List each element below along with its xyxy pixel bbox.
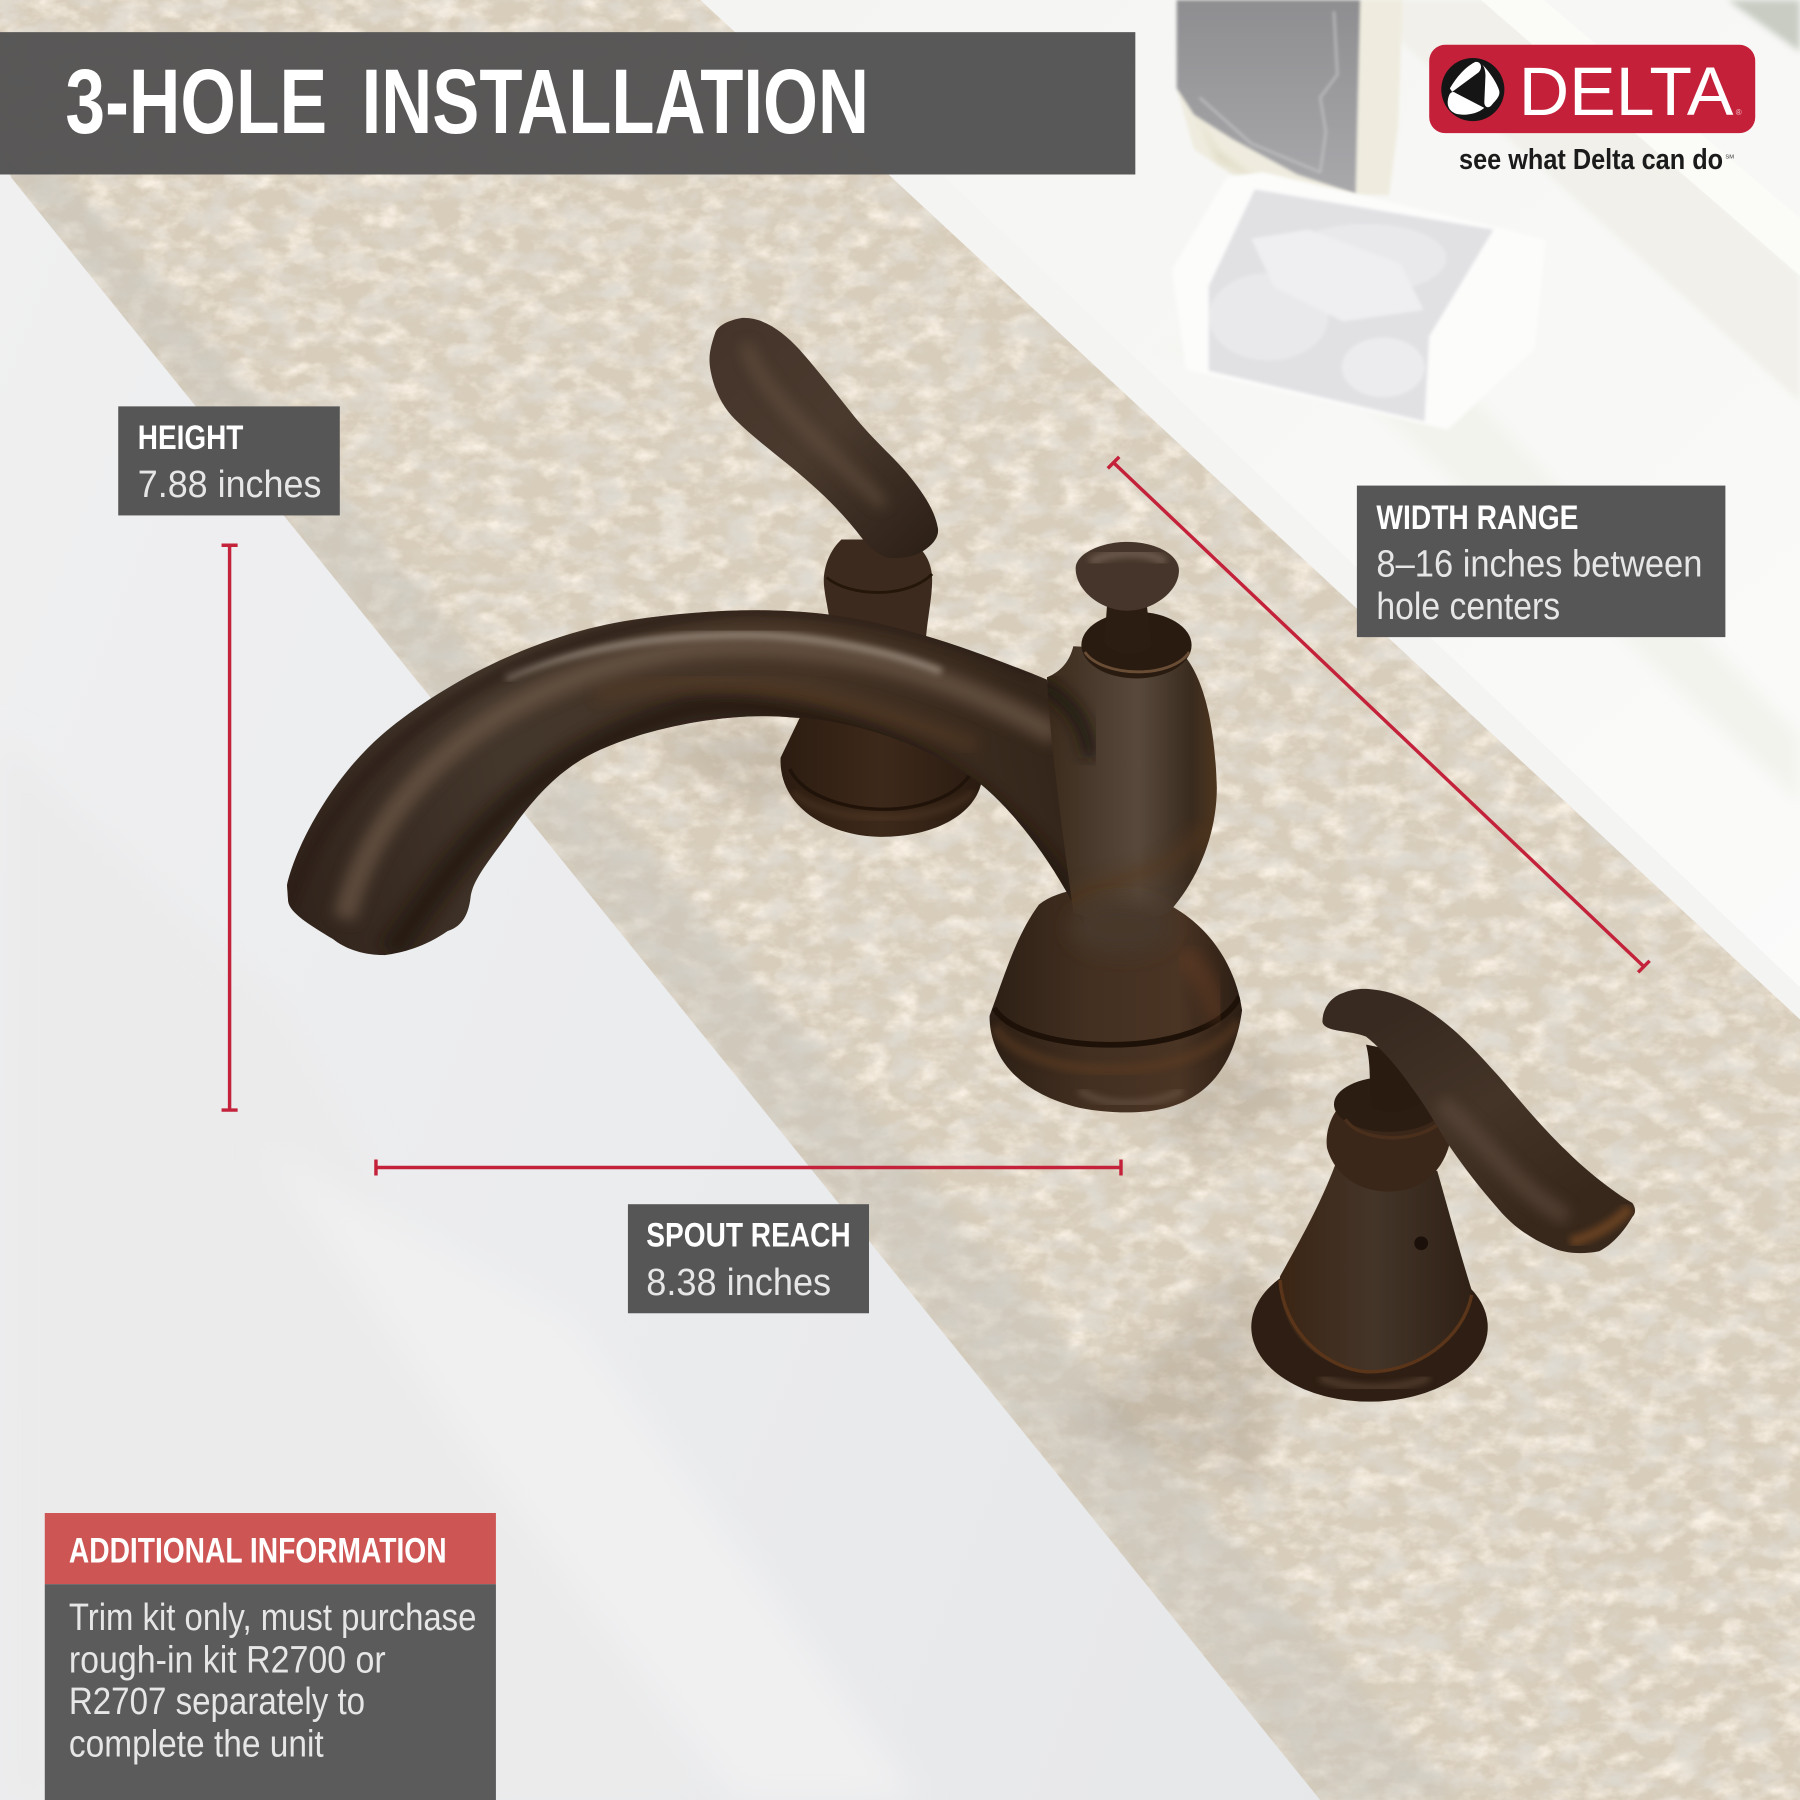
logo wordmark: DELTA — [1519, 53, 1733, 130]
back handle base — [781, 700, 983, 837]
faucet: front handle — [1251, 989, 1635, 1402]
panel: additional information: rough-in kit R2700 or — [69, 1640, 386, 1682]
label: height: 7.88 inches — [138, 464, 321, 506]
dimension line: width range — [1108, 457, 1650, 972]
logo badge — [1429, 45, 1755, 133]
tagline: see what Delta can do — [1459, 144, 1723, 176]
label: width range — [1357, 486, 1725, 637]
title: INSTALLATION — [362, 51, 869, 153]
label: width range: hole centers — [1376, 586, 1560, 628]
logo symbol — [1441, 58, 1504, 121]
countertop front edge — [0, 149, 1458, 1800]
front handle set-screw hole — [1414, 1236, 1428, 1250]
label: height — [118, 406, 340, 515]
front handle cone — [1280, 1165, 1472, 1372]
faucet: back handle — [709, 318, 983, 837]
panel: additional information: Trim kit only, must purchase — [69, 1597, 476, 1639]
title: 3-HOLE — [65, 51, 327, 153]
background: boxed soap — [1172, 172, 1546, 429]
label: width range: 8–16 inches between — [1376, 543, 1702, 585]
panel: additional information: R2707 separately to — [69, 1681, 365, 1723]
back handle lever — [709, 318, 938, 558]
faucet: pop-up knob — [1076, 542, 1192, 678]
registered mark: ® — [1736, 108, 1742, 117]
faucet: center body — [1039, 646, 1217, 955]
background: bottle — [1177, 0, 1403, 195]
label: spout reach: SPOUT REACH — [646, 1217, 851, 1255]
cast shadows — [643, 723, 1309, 1492]
dimension line: spout reach — [375, 1159, 1122, 1176]
dimension line: height — [222, 544, 238, 1111]
label: spout reach — [628, 1204, 869, 1313]
front handle bulb — [1327, 1091, 1450, 1192]
front handle lever — [1322, 989, 1635, 1253]
back handle bulb — [824, 540, 932, 677]
Delta logo — [1429, 45, 1755, 176]
title bar — [0, 32, 1135, 174]
label: height: HEIGHT — [138, 419, 243, 457]
label: spout reach: 8.38 inches — [646, 1262, 831, 1304]
background: window sill — [689, 0, 1800, 1033]
label: width range: WIDTH RANGE — [1376, 499, 1578, 537]
panel body — [45, 1584, 496, 1800]
panel: additional information — [45, 1513, 496, 1800]
background: sink soft shading — [0, 735, 918, 1800]
panel header — [45, 1513, 496, 1584]
service mark: SM — [1725, 154, 1734, 160]
front handle base — [1251, 1252, 1488, 1402]
faucet: center base — [990, 887, 1242, 1112]
panel: additional information: complete the unit — [69, 1723, 324, 1765]
faucet: spout — [287, 610, 1085, 955]
panel: additional information: ADDITIONAL INFORMATION — [69, 1530, 447, 1570]
